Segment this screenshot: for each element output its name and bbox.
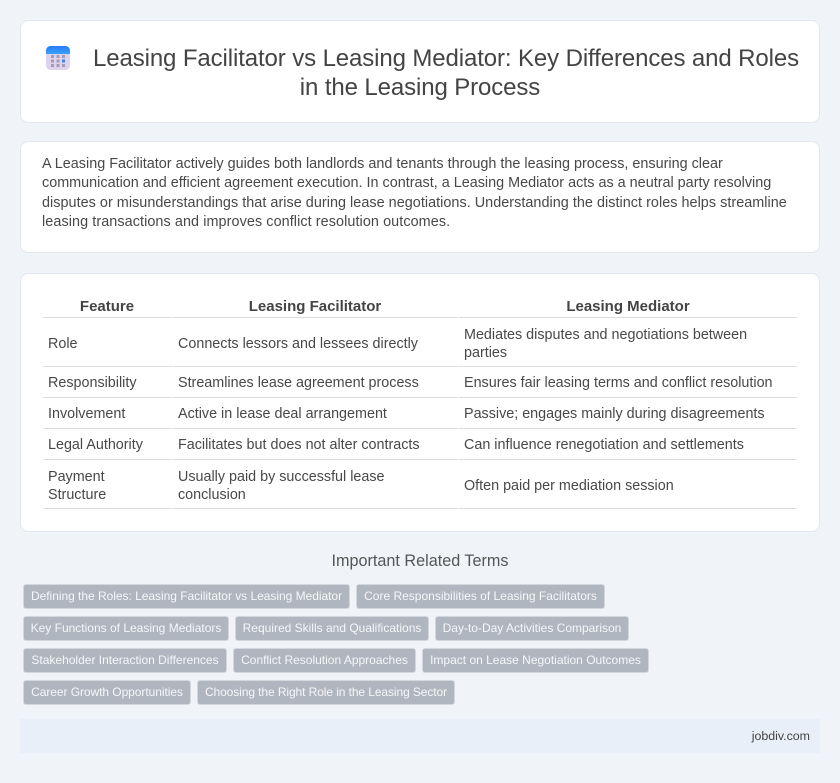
intro paragraph: leasing transactions and improves conflict resolution outcomes.: [42, 214, 450, 230]
table header: [80, 298, 690, 315]
row: responsibility: Streamlines lease agreement process: [178, 375, 419, 391]
related terms heading: Important Related Terms: [332, 552, 508, 570]
tag: Defining the Roles: Leasing Facilitator vs Leasing Mediator: [31, 589, 342, 603]
row: involvement: Involvement: [48, 406, 125, 422]
intro card: [20, 141, 820, 253]
tag: Core Responsibilities of Leasing Facilitators: [364, 589, 597, 603]
row: role: Connects lessors and lessees directly: [178, 336, 418, 352]
footer bar: [20, 719, 820, 753]
tag: Stakeholder Interaction Differences: [31, 653, 219, 667]
table header: Leasing Mediator: [566, 298, 690, 315]
intro paragraph: communication and efficient agreement execution. In contrast, a Leasing Mediator acts as a neutral party resolving: [42, 175, 771, 191]
row: payment structure: [48, 469, 674, 503]
comparison table card: [20, 273, 820, 532]
tag: Conflict Resolution Approaches: [241, 653, 408, 667]
table header: Feature: [80, 298, 134, 315]
row: legal authority: [48, 437, 744, 453]
tag: [235, 616, 429, 641]
row: responsibility: Responsibility: [48, 375, 136, 391]
intro paragraph: A Leasing Facilitator actively guides both landlords and tenants through the leasing process, ensuring clear: [42, 156, 723, 172]
row: role: Mediates disputes and negotiations between: [464, 327, 747, 343]
row: legal authority: Can influence renegotiation and settlements: [464, 437, 744, 453]
row: responsibility: [48, 375, 773, 391]
related terms tags: [23, 584, 649, 705]
tag: Required Skills and Qualifications: [243, 621, 421, 635]
tag: [422, 648, 649, 673]
tag: Choosing the Right Role in the Leasing Sector: [205, 685, 447, 699]
intro paragraph: disputes or misunderstandings that arise during lease negotiations. Understanding the distinct roles helps streamline: [42, 195, 787, 211]
table: [43, 298, 797, 509]
tag: [435, 616, 629, 641]
row: involvement: [48, 406, 765, 422]
row: payment structure: Usually paid by successful lease: [178, 469, 384, 485]
tag: [356, 584, 605, 609]
row: role: Role: [48, 336, 78, 352]
footer source: jobdiv.com: [752, 729, 810, 743]
tag: Key Functions of Leasing Mediators: [31, 621, 221, 635]
row: role: parties: [464, 345, 507, 361]
title: in the Leasing Process: [300, 74, 540, 101]
header card: [20, 20, 820, 123]
row: involvement: Passive; engages mainly during disagreements: [464, 406, 765, 422]
row: payment structure: Structure: [48, 487, 106, 503]
tag: [23, 584, 350, 609]
tag: Impact on Lease Negotiation Outcomes: [430, 653, 641, 667]
tag: Day-to-Day Activities Comparison: [443, 621, 621, 635]
title: Leasing Facilitator vs Leasing Mediator: Key Differences and Roles: [93, 45, 799, 72]
tag: Career Growth Opportunities: [31, 685, 183, 699]
tag: [23, 616, 229, 641]
icon: calendar: [46, 46, 70, 70]
table header: Leasing Facilitator: [249, 298, 381, 315]
row: responsibility: Ensures fair leasing terms and conflict resolution: [464, 375, 773, 391]
intro paragraph: [42, 156, 787, 230]
tag: [23, 680, 191, 705]
title: [93, 45, 799, 101]
row: involvement: Active in lease deal arrangement: [178, 406, 387, 422]
row: role: [48, 327, 747, 361]
row: payment structure: Often paid per mediation session: [464, 478, 674, 494]
row: legal authority: Facilitates but does not alter contracts: [178, 437, 420, 453]
tag: [23, 648, 227, 673]
row: payment structure: conclusion: [178, 487, 246, 503]
row: payment structure: Payment: [48, 469, 105, 485]
row: legal authority: Legal Authority: [48, 437, 143, 453]
tag: [197, 680, 455, 705]
tag: [233, 648, 416, 673]
